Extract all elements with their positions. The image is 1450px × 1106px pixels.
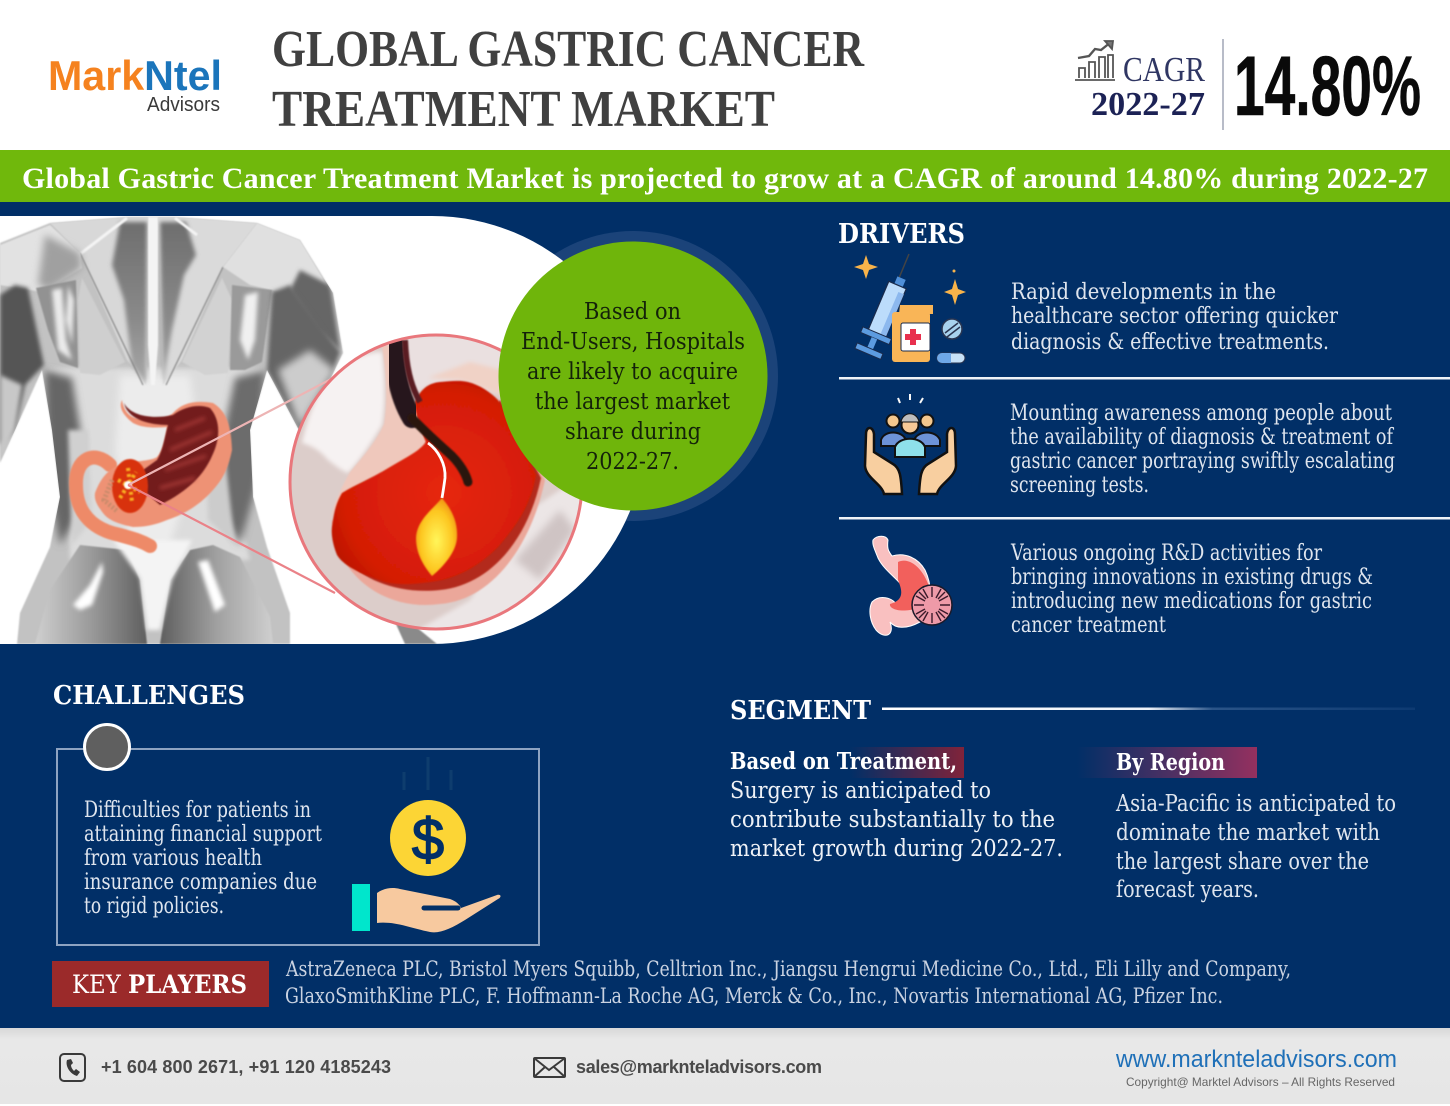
logo: MarkNtel Advisors: MarkNtel [48,52,222,99]
CAGR block [1075,39,1421,133]
phone numbers: +1 604 800 2671, +91 120 4185243 [101,1057,391,1077]
footer [0,1028,1450,1104]
flame [416,498,457,576]
segment text: region: dominate the market with [1116,820,1380,846]
challenge text: insurance companies due [84,870,317,895]
driver text 1: healthcare sector offering quicker [1011,304,1338,329]
icon: phone [60,1054,85,1081]
website: www.marknteladvisors.com [1115,1046,1397,1073]
stomach inside [332,381,536,584]
navy background panel [0,202,1450,1028]
panel: challenges [57,724,539,945]
CAGR label: CAGR [1123,50,1206,89]
highlight: region [1077,747,1257,778]
driver text 3: introducing new medications for gastric [1011,589,1372,614]
title [272,21,865,138]
segment text: treatment: market growth during 2022-27. [730,836,1063,862]
callout ring [488,231,778,521]
icon: coin over hand [352,757,501,932]
stomach small [76,400,232,546]
lats [78,278,125,375]
driver text 3: cancer treatment [1011,613,1166,638]
driver text 3: Various ongoing R&D activities for [1010,541,1322,566]
thread [428,443,445,498]
title: GLOBAL GASTRIC CANCER [272,21,865,78]
illustration: stomach anatomy [0,216,646,644]
key players list [285,957,1291,1008]
segment text: region [1115,749,1396,903]
arms [0,285,44,445]
green banner [0,150,1450,202]
challenge text: to rigid policies. [84,894,224,919]
magnifier lines [128,377,335,593]
callout: end-users: Based on [584,299,681,325]
marker circle [84,724,130,770]
hips [35,545,147,644]
driver text 3: bringing innovations in existing drugs & [1011,565,1373,590]
outer tissue [422,489,580,628]
segment text: region: By Region [1116,749,1225,776]
icon: stomach with tumor [870,536,952,635]
white blob [302,352,384,473]
challenge text [84,798,322,919]
heading: segment: SEGMENT [730,696,872,726]
torso photo [0,217,437,644]
callout: end-users: the largest market [535,389,731,415]
segment text: treatment: Surgery is anticipated to [730,778,991,804]
driver text 1 [1011,280,1338,355]
gastric lip [330,345,427,520]
segment text: treatment [730,748,1063,862]
heading: challenges: CHALLENGES [53,681,245,711]
logo: MarkNtel Advisors: Advisors [147,94,220,116]
icon: mail [534,1058,565,1077]
driver text 1: diagnosis & effective treatments. [1011,330,1329,355]
driver text 3 [1010,541,1373,638]
driver text 2: screening tests. [1010,473,1149,498]
lower back [48,368,262,560]
driver text 2 [1010,401,1395,498]
icon: syringe and medicine [854,254,966,363]
green banner: Global Gastric Cancer Treatment Market is projected to grow at a CAGR of around 14.80% during 2022-27 [22,162,1428,195]
email: sales@marknteladvisors.com [576,1057,822,1077]
callout: end-users: 2022-27. [586,449,679,475]
challenge text: Difficulties for patients in [84,798,311,823]
magnifier circle [290,335,600,640]
panel: segment [730,696,1415,903]
callout: end-users: are likely to acquire [527,359,738,385]
callout: end-users [498,242,768,510]
segment text: region: the largest share over the [1116,849,1369,875]
CAGR years: 2022-27 [1091,86,1205,123]
driver text 1: Rapid developments in the [1011,280,1276,305]
segment text: region: Asia-Pacific is anticipated to [1115,791,1396,817]
segment text: treatment: Based on Treatment, [730,748,957,775]
segment text: treatment: contribute substantially to the [730,807,1055,833]
segment text: region: forecast years. [1116,877,1259,903]
icon: growth chart [1075,41,1115,80]
forearm tips [396,625,437,644]
challenge text: from various health [84,846,262,871]
icon: people in hands [865,394,956,494]
callout: end-users: share during [565,419,701,445]
endoscope [393,340,412,418]
stomach wall [332,400,545,605]
heading: drivers: DRIVERS [838,219,965,250]
key players: KEY PLAYERS [72,970,247,999]
highlight: treatment [850,747,964,778]
title: TREATMENT MARKET [272,81,775,138]
key players [52,957,1291,1008]
deltoids [0,225,82,292]
trapezius [50,217,148,385]
key players list: GlaxoSmithKline PLC, F. Hoffmann-La Roche AG, Merck & Co., Inc., Novartis International AG, Pfizer Inc. [285,984,1223,1008]
copyright: Copyright@ Marktel Advisors – All Rights Reserved [1126,1075,1395,1089]
icon: coin over hand: $ [412,807,444,872]
callout: end-users: End-Users, Hospitals [521,329,745,355]
challenge text: attaining financial support [84,822,322,847]
